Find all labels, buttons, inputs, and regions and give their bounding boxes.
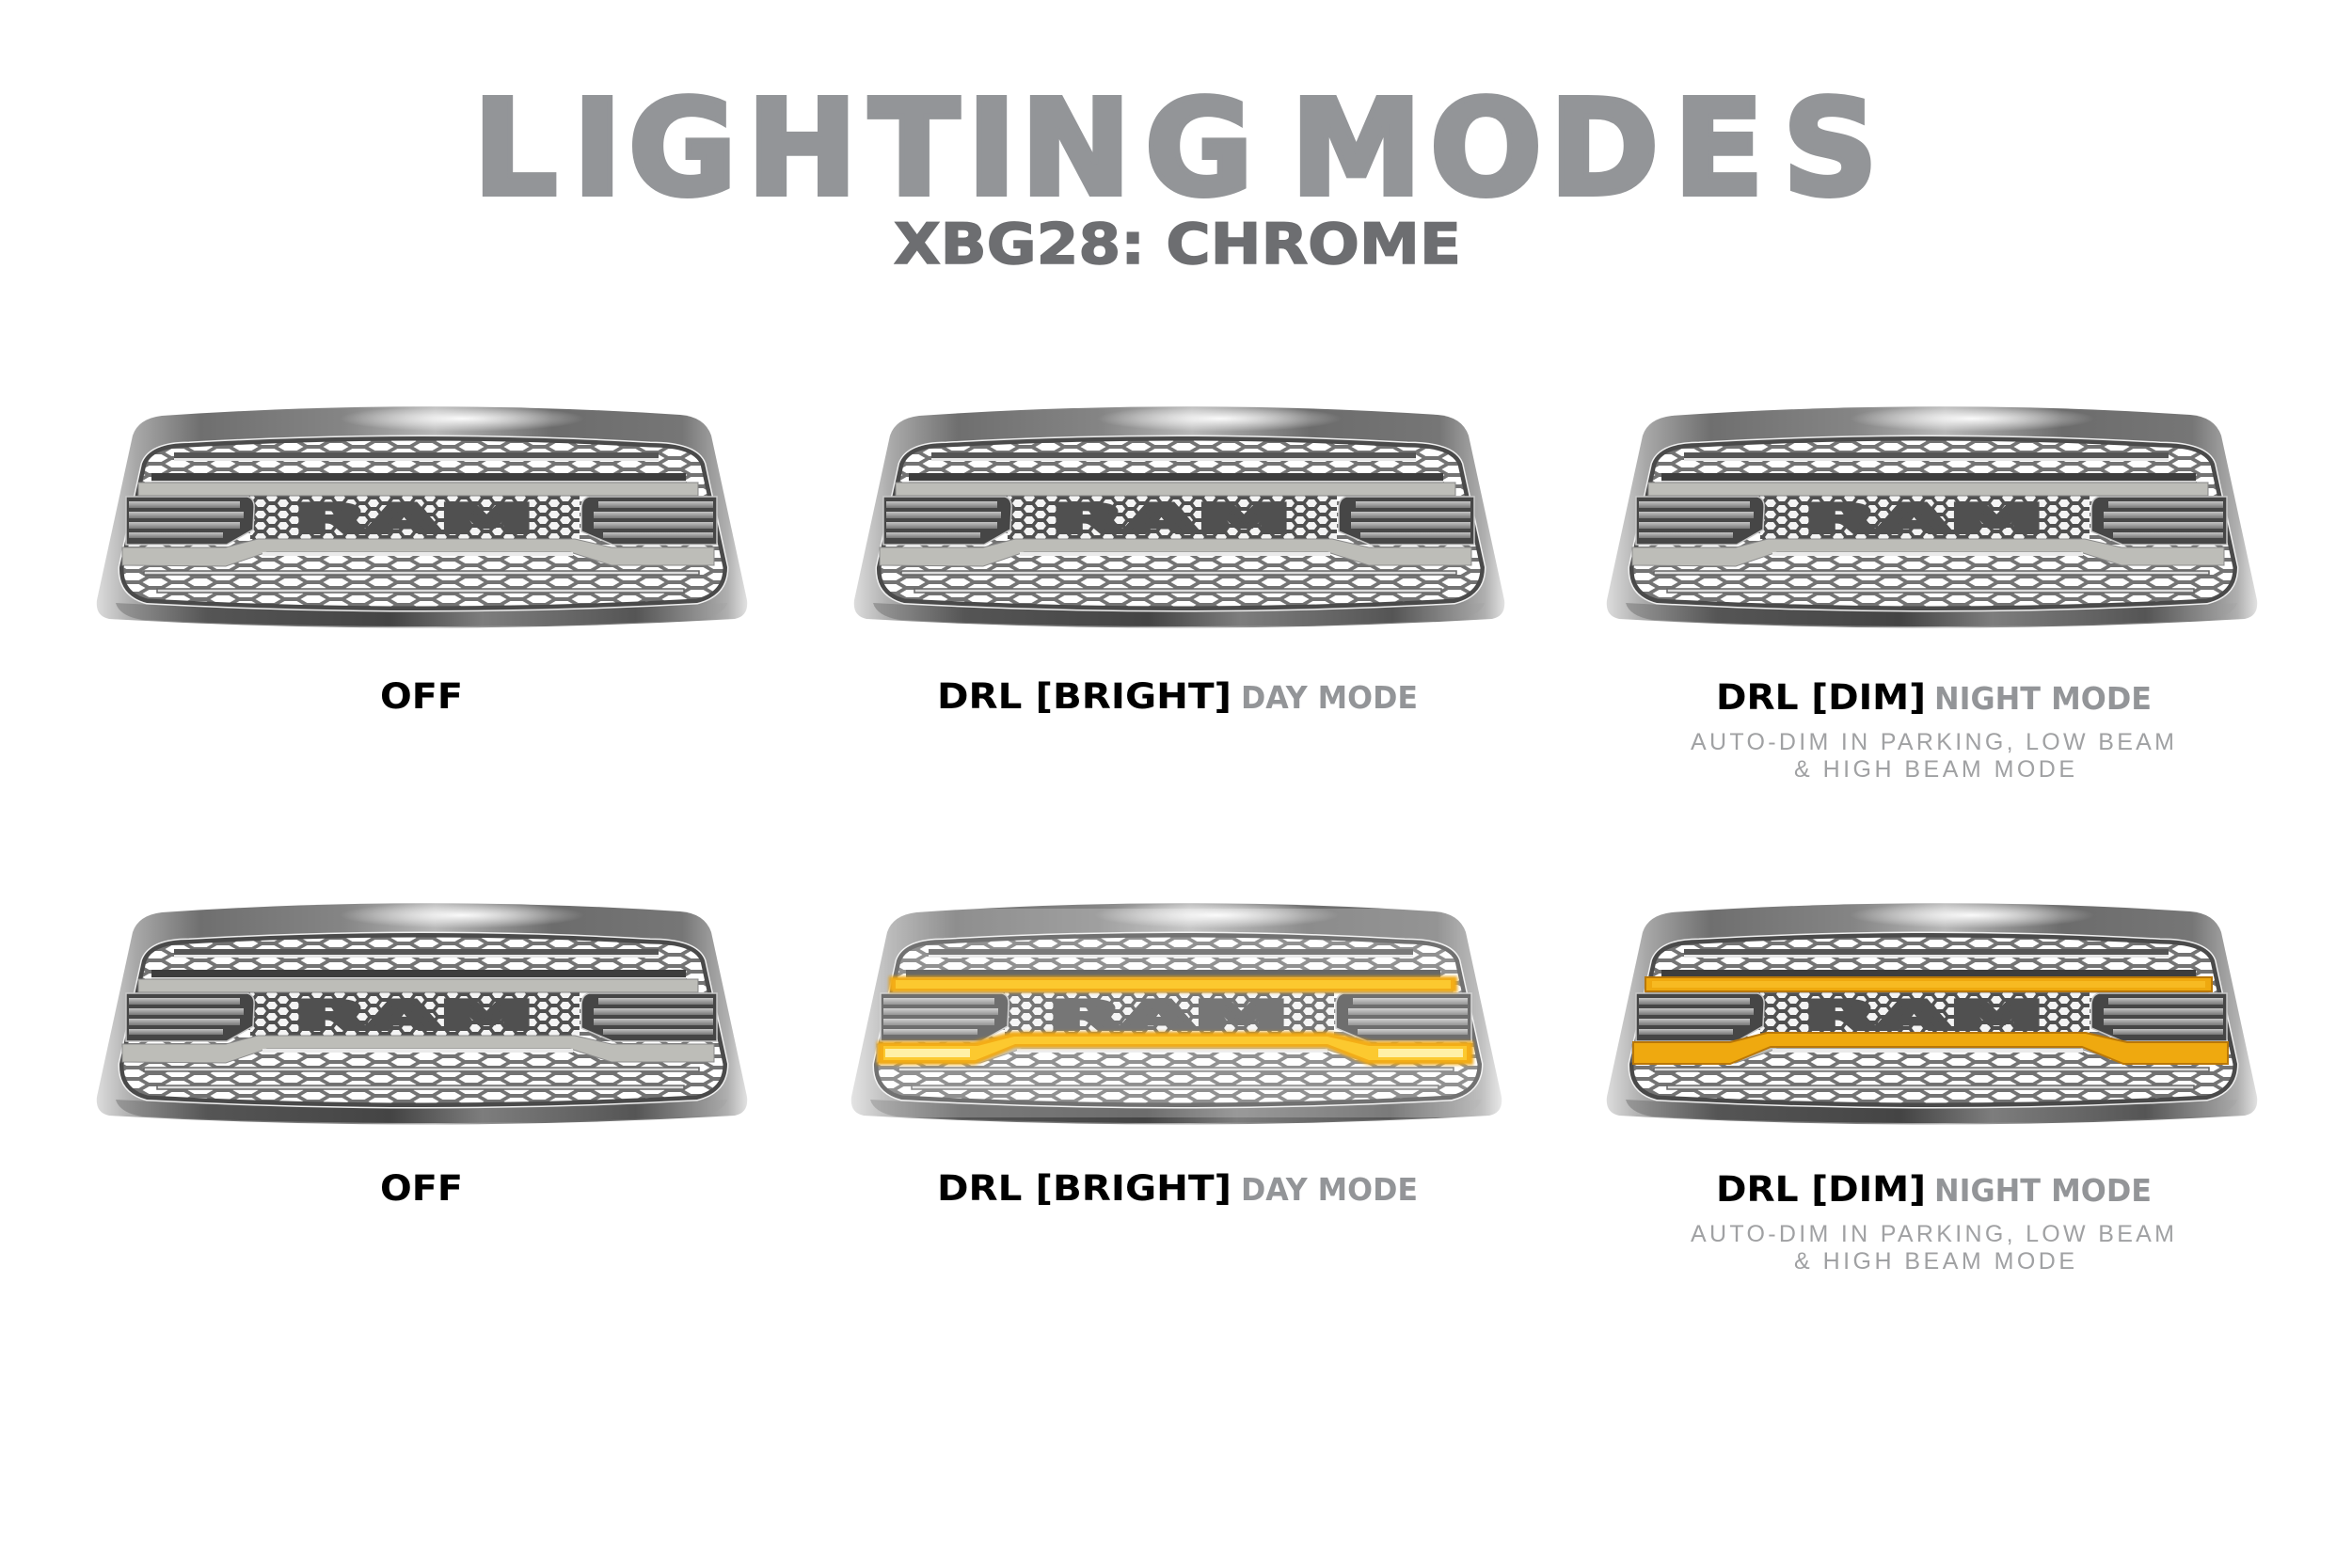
label: DRL dim night mode: NIGHT MODE — [1934, 680, 2152, 717]
note: auto-dim — [1691, 1221, 2174, 1275]
grille photo: off — [97, 405, 747, 628]
panel: DRL dim, row 2 — [1607, 902, 2257, 1275]
label: DRL dim night mode: DRL [DIM] — [1716, 677, 1926, 718]
grille photo: DRL bright unlit — [854, 405, 1504, 628]
note: auto-dim — [1691, 729, 2174, 783]
panel: off, row 1 — [97, 405, 747, 717]
subtitle: XBG28: CHROME — [894, 212, 1461, 277]
note: auto-dim: & HIGH BEAM MODE — [1794, 1248, 2074, 1275]
note: auto-dim: AUTO-DIM IN PARKING, LOW BEAM — [1691, 729, 2174, 755]
note: auto-dim: & HIGH BEAM MODE — [1794, 756, 2074, 783]
panel: off, row 2 — [97, 902, 747, 1209]
label: DRL dim night mode: DRL [DIM] — [1716, 1169, 1926, 1210]
label: DRL bright day mode — [937, 1168, 1418, 1209]
panel: DRL bright, row 2 — [850, 902, 1502, 1209]
label: DRL bright day mode: DAY MODE — [1241, 1171, 1418, 1208]
grille photo: DRL dim lit amber — [1607, 902, 2257, 1125]
panel: DRL dim, row 1 — [1607, 405, 2257, 783]
label: off: OFF — [380, 1168, 463, 1209]
label: off: OFF — [380, 676, 463, 717]
label: DRL bright day mode: DAY MODE — [1241, 679, 1418, 716]
label: DRL bright day mode — [937, 676, 1418, 717]
label: DRL dim night mode: NIGHT MODE — [1934, 1172, 2152, 1209]
grille photo: DRL dim unlit — [1607, 405, 2257, 628]
panel: DRL bright, row 1 — [854, 405, 1504, 717]
note: auto-dim: AUTO-DIM IN PARKING, LOW BEAM — [1691, 1221, 2174, 1247]
label: DRL bright day mode: DRL [BRIGHT] — [937, 1168, 1232, 1209]
label: DRL dim night mode — [1716, 677, 2152, 718]
title: LIGHTING MODES — [473, 72, 1878, 226]
label: DRL bright day mode: DRL [BRIGHT] — [937, 676, 1232, 717]
label: DRL dim night mode — [1716, 1169, 2152, 1210]
grille photo: DRL bright lit amber — [850, 902, 1502, 1125]
grille photo: off — [97, 902, 747, 1125]
